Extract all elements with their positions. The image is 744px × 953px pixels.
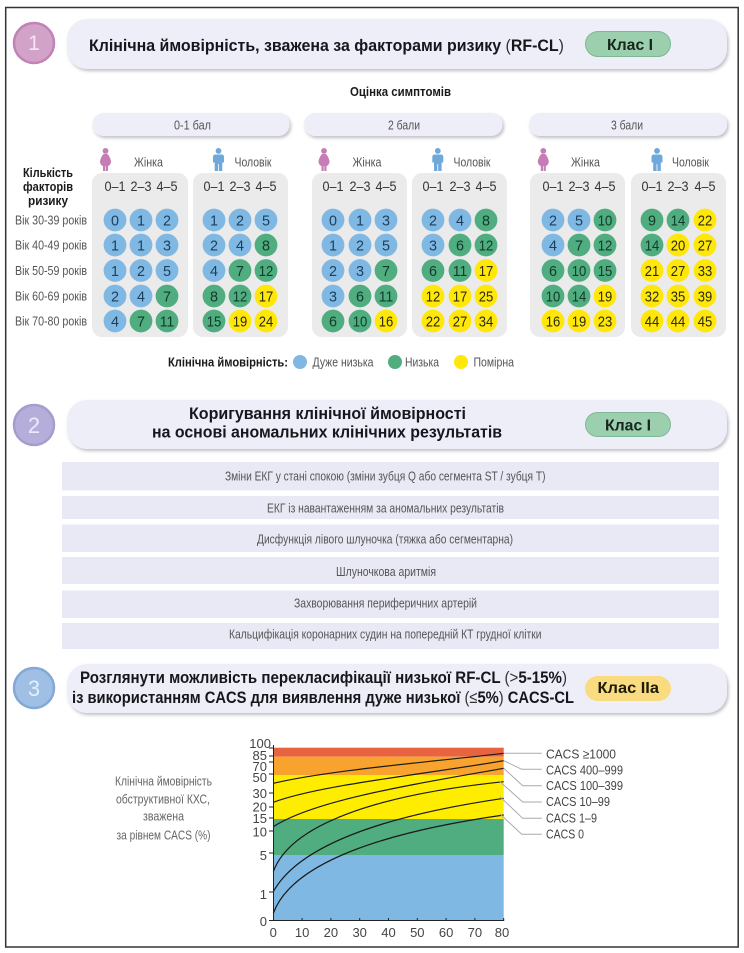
panel: 3 points, woman: 4 <box>549 238 557 254</box>
panel: 2 points, woman: 5 <box>382 238 390 254</box>
y-axis tick labels: 100 <box>249 736 271 751</box>
y-axis tick labels: 0 <box>260 914 267 929</box>
curve labels: CACS 10–99 <box>546 794 610 809</box>
panel: 2 points, man <box>412 173 507 337</box>
class badge: section 2 <box>586 412 670 436</box>
finding: LV dysfunction: Дисфункція лівого шлуночка (тяжка або сегментарна) <box>257 532 513 546</box>
x-axis tick labels: 50 <box>410 925 425 940</box>
section 3 heading bar: із використанням CACS для виявлення дуже низької (≤5%) CACS-CL <box>72 688 574 707</box>
panel: 3 points, woman: 12 <box>598 238 612 254</box>
panel: 2 points, man: 12 <box>426 288 440 306</box>
icon: man 1 <box>213 148 224 171</box>
panel: 2 points, man: 17 <box>453 288 467 306</box>
finding: LV dysfunction <box>62 524 719 552</box>
panel: 0-1 points, man: 17 <box>259 288 273 306</box>
panel: 2 points, man: 6 <box>429 263 437 280</box>
leader lines <box>500 753 542 834</box>
icon: man 3 <box>652 148 662 171</box>
curve labels: CACS 400–999 <box>546 762 623 778</box>
panel: 3 points, woman: 0–1 <box>542 179 564 194</box>
panel: 3 points, man: 32 <box>645 288 659 306</box>
panel: 0-1 points, man: 5 <box>262 212 270 230</box>
label: woman 2: Жінка <box>352 154 382 170</box>
finding: coronary calcification: Кальцифікація коронарних судин на попередній КТ грудної клітки <box>229 626 542 642</box>
curve labels: CACS 1–9 <box>546 810 597 826</box>
panel: 0-1 points, man <box>193 173 288 337</box>
age labels: Вік 60-69 років <box>15 288 87 304</box>
panel: 0-1 points, woman: 7 <box>163 288 171 306</box>
icon: woman 2 <box>318 148 330 171</box>
axes <box>269 745 504 921</box>
panel: 0-1 points, woman: 1 <box>137 238 145 254</box>
y-axis tick labels: 15 <box>253 811 267 826</box>
y-axis title <box>115 774 212 842</box>
panel: 3 points, man: 9 <box>648 212 656 230</box>
panel: 3 points, woman: 4–5 <box>594 179 616 194</box>
panel: 2 points, man: 25 <box>479 288 493 306</box>
class badge: section 2: Клас I <box>605 418 651 434</box>
panel: 2 points, man: 17 <box>479 263 493 280</box>
y-axis tick labels: 5 <box>260 848 267 863</box>
icon: woman 1 <box>100 148 111 171</box>
panel: 2 points, man: 22 <box>426 314 440 330</box>
panel: 3 points, man: 14 <box>645 238 659 254</box>
label: man 3: Чоловік <box>672 154 709 170</box>
section 1 heading bar <box>67 19 727 69</box>
y-axis tick labels <box>249 736 271 929</box>
panel: 3 points, man: 27 <box>671 263 685 280</box>
panel: 2 points, man: 2 <box>429 212 437 230</box>
panel: 3 points, man: 27 <box>698 238 712 254</box>
curve labels <box>546 746 623 842</box>
panel: 0-1 points, man: 2–3 <box>230 179 250 194</box>
y-axis title: зважена <box>143 808 185 824</box>
panel: 3 points, man: 2–3 <box>668 179 688 194</box>
panel: 2 points, woman: 3 <box>329 288 337 306</box>
panel: 3 points, man: 45 <box>698 314 712 330</box>
panel: 2 points, woman: 3 <box>382 212 390 230</box>
age labels: Вік 40-49 років <box>15 238 87 252</box>
panel: 3 points, woman: 2 <box>549 212 557 230</box>
x-axis tick labels: 20 <box>324 925 338 940</box>
age labels: Вік 70-80 років <box>15 314 87 328</box>
panel: 0-1 points, man: 4–5 <box>256 179 276 194</box>
panel: 0-1 points, woman: 0 <box>111 212 119 230</box>
section 1 number badge <box>14 23 54 63</box>
panel: 3 points, woman: 6 <box>549 263 557 280</box>
panel: 3 points, woman: 10 <box>572 263 586 280</box>
panel: 0-1 points, man: 12 <box>233 288 247 306</box>
panel: 3 points, man: 20 <box>671 238 685 254</box>
panel: 0-1 points, man: 0–1 <box>204 179 224 194</box>
panel: 0-1 points, woman: 4–5 <box>156 179 178 194</box>
panel: 0-1 points, woman: 2 <box>111 288 119 306</box>
curve labels: CACS 100–399 <box>546 778 623 793</box>
section 2 heading bar: Коригування клінічної ймовірності <box>189 404 466 423</box>
y-axis title: обструктивної КХС, <box>116 792 210 806</box>
panel: 3 points, woman: 19 <box>598 288 612 306</box>
panel: 2 points, woman: 0–1 <box>322 179 344 194</box>
panel: 0-1 points, man: 8 <box>262 238 270 254</box>
pill: 0-1 points: 0-1 бал <box>174 118 211 132</box>
pill: 2 points: 2 бали <box>388 118 420 132</box>
panel: 0-1 points, woman: 2–3 <box>130 179 152 194</box>
panel: 2 points, woman: 11 <box>379 288 393 306</box>
subheading: symptom score: Оцінка симптомів <box>350 85 451 99</box>
likelihood curves <box>273 753 504 913</box>
x-axis tick labels <box>270 925 509 940</box>
panel: 0-1 points, woman: 3 <box>163 238 171 254</box>
legend: clinical likelihood <box>168 354 515 370</box>
x-axis tick labels: 0 <box>270 925 277 940</box>
panel: 0-1 points, man: 4 <box>236 238 244 254</box>
legend: clinical likelihood: Низька <box>405 354 440 370</box>
panel: 2 points, woman: 1 <box>329 238 337 254</box>
chart bands <box>273 748 504 920</box>
panel: 3 points, man: 14 <box>671 212 685 230</box>
section 3 heading bar: Розглянути можливість перекласифікації низької RF-CL (>5-15%) <box>80 668 567 687</box>
list: abnormal clinical findings <box>62 462 719 649</box>
icon: woman 3 <box>538 148 549 171</box>
finding: exercise ECG <box>62 496 719 519</box>
pill: 2 points <box>304 113 502 136</box>
panel: 0-1 points, man: 7 <box>236 263 244 280</box>
panel: 3 points, woman: 19 <box>572 314 586 330</box>
x-axis tick labels: 30 <box>352 925 367 940</box>
y-axis tick labels: 85 <box>253 748 267 763</box>
finding: exercise ECG: ЕКГ із навантаженням за аномальних результатів <box>267 500 504 516</box>
y-axis tick labels: 20 <box>253 800 267 814</box>
panel: 2 points, man: 27 <box>453 314 467 330</box>
section 2 number badge: 2 <box>28 413 40 438</box>
panel: 3 points, woman: 14 <box>572 288 586 306</box>
section 2 heading bar: на основі аномальних клінічних результатів <box>152 422 502 442</box>
curve labels: CACS ≥1000 <box>546 746 616 762</box>
panel: 2 points, man: 8 <box>482 212 490 230</box>
panel: 3 points, man: 39 <box>698 288 712 306</box>
panel: 2 points, woman <box>312 173 407 337</box>
panel: 3 points, man: 0–1 <box>642 179 662 194</box>
panel: 2 points, man: 11 <box>453 263 467 280</box>
x-axis tick labels: 70 <box>468 925 482 940</box>
panel: 2 points, man: 6 <box>456 238 464 254</box>
class badge: section 3: Клас IIa <box>598 680 659 697</box>
section 1 heading bar: Клінічна ймовірність, зважена за факторами ризику (RF-CL) <box>89 36 564 55</box>
panel: 2 points, woman: 16 <box>379 314 393 330</box>
y-axis tick labels: 1 <box>260 887 267 902</box>
panel: 2 points, woman: 3 <box>356 263 364 280</box>
panel: 0-1 points, woman: 1 <box>111 263 119 280</box>
panel: 2 points, woman: 7 <box>382 263 390 280</box>
panel: 0-1 points, woman: 11 <box>160 314 174 330</box>
panel: 3 points, woman: 7 <box>575 238 583 254</box>
x-axis tick labels: 40 <box>381 925 396 940</box>
label: man 2: Чоловік <box>454 154 491 170</box>
panel: 3 points, woman: 10 <box>598 212 612 230</box>
panel: 0-1 points, woman <box>92 173 188 337</box>
row header: number of risk factors: Кількість <box>23 165 73 180</box>
y-axis tick labels: 70 <box>253 759 267 774</box>
age labels: Вік 50-59 років <box>15 263 87 278</box>
panel: 2 points, woman: 6 <box>356 288 364 306</box>
section 1 number badge: 1 <box>28 32 40 55</box>
panel: 3 points, man: 44 <box>645 314 659 330</box>
finding: resting ECG: Зміни ЕКГ у стані спокою (зміни зубця Q або сегмента ST / зубця T) <box>225 468 546 484</box>
finding: peripheral artery disease: Захворювання периферичних артерій <box>294 596 477 610</box>
section 2 heading bar <box>67 400 727 449</box>
panel: 0-1 points, woman: 0–1 <box>104 179 126 194</box>
finding: resting ECG <box>62 462 719 490</box>
panel: 0-1 points, woman: 5 <box>163 263 171 280</box>
x-axis tick labels: 10 <box>295 925 309 940</box>
section 3 number badge <box>14 668 54 708</box>
finding: ventricular arrhythmia <box>62 557 719 584</box>
panel: 3 points, woman: 2–3 <box>568 179 590 194</box>
class badge: section 3 <box>585 676 671 701</box>
panel: 3 points, man <box>631 173 726 337</box>
pill: 0-1 points <box>92 113 290 136</box>
panel: 2 points, man: 34 <box>479 314 493 330</box>
legend: clinical likelihood: Клінічна ймовірність: <box>168 354 288 370</box>
panel: 3 points, man: 44 <box>671 314 685 330</box>
panel: 2 points, woman: 2 <box>329 263 337 280</box>
legend: clinical likelihood: Дуже низька <box>312 354 374 370</box>
panel: 3 points, woman <box>530 173 625 337</box>
panel: 2 points, woman: 1 <box>356 212 364 230</box>
panel: 3 points, woman: 5 <box>575 212 583 230</box>
class badge: section 1 <box>586 32 670 56</box>
panel: 2 points, man: 0–1 <box>422 179 444 194</box>
panel: 3 points, man: 4–5 <box>694 179 716 194</box>
finding: ventricular arrhythmia: Шлуночкова аритмія <box>336 564 436 579</box>
panel: 0-1 points, man: 2 <box>236 212 244 230</box>
age labels <box>15 212 87 328</box>
panel: 2 points, man: 2–3 <box>450 179 470 194</box>
panel: 0-1 points, man: 19 <box>233 314 247 330</box>
panel: 2 points, man: 12 <box>479 238 493 254</box>
panel: 3 points, woman: 23 <box>598 314 612 330</box>
legend: clinical likelihood: Помірна <box>474 354 515 370</box>
panel: 0-1 points, woman: 4 <box>111 314 119 330</box>
panel: 2 points, woman: 2–3 <box>350 179 370 194</box>
label: man 1: Чоловік <box>234 154 272 170</box>
panel: 3 points, man: 35 <box>671 288 685 306</box>
x-axis tick labels: 80 <box>495 925 509 940</box>
section 3 number badge: 3 <box>28 676 40 701</box>
panel: 0-1 points, woman: 4 <box>137 288 145 306</box>
panel: 0-1 points, man: 4 <box>210 263 218 280</box>
panel: 0-1 points, woman: 2 <box>163 212 171 230</box>
panel: 3 points, man: 21 <box>645 263 659 280</box>
panel: 0-1 points, woman: 2 <box>137 263 145 280</box>
row header: number of risk factors <box>23 165 73 208</box>
panel: 2 points, woman: 6 <box>329 314 337 330</box>
icon: man 2 <box>432 148 443 171</box>
pill: 3 points <box>529 113 727 136</box>
panel: 2 points, man: 3 <box>429 238 437 254</box>
panel: 2 points, woman: 2 <box>356 238 364 254</box>
panel: 2 points, woman: 0 <box>329 212 337 230</box>
class badge: section 1: Клас I <box>607 37 653 54</box>
age labels: Вік 30-39 років <box>15 212 87 228</box>
y-axis tick labels: 10 <box>253 824 267 840</box>
finding: peripheral artery disease <box>62 590 719 618</box>
section 2 number badge <box>14 405 54 445</box>
panel: 0-1 points, woman: 1 <box>111 238 119 254</box>
panel: 0-1 points, man: 1 <box>210 212 218 230</box>
chart: CACS-weighted clinical likelihood <box>249 736 623 940</box>
y-axis tick labels: 30 <box>253 786 267 801</box>
panel: 3 points, woman: 10 <box>546 288 560 306</box>
panel: 2 points, woman: 10 <box>353 314 367 330</box>
panel: 0-1 points, man: 24 <box>259 314 273 330</box>
label: woman 1: Жінка <box>134 154 164 170</box>
panel: 2 points, man: 4–5 <box>476 179 496 194</box>
panel: 3 points, woman: 16 <box>546 314 560 330</box>
row header: number of risk factors: ризику <box>28 193 69 208</box>
section 3 heading bar <box>67 664 727 713</box>
y-axis title: за рівнем CACS (%) <box>116 828 210 842</box>
y-axis tick labels: 50 <box>253 770 267 785</box>
y-axis title: Клінічна ймовірність <box>115 774 212 788</box>
panel: 0-1 points, man: 12 <box>259 263 273 280</box>
x-axis tick labels: 60 <box>439 925 453 940</box>
panel: 3 points, man: 33 <box>698 263 712 280</box>
pill: 3 points: 3 бали <box>611 118 643 132</box>
panel: 0-1 points, man: 2 <box>210 238 218 254</box>
panel: 3 points, man: 22 <box>698 212 712 230</box>
label: woman 3: Жінка <box>571 154 601 170</box>
curve labels: CACS 0 <box>546 826 584 842</box>
panel: 3 points, woman: 15 <box>598 263 612 280</box>
panel: 0-1 points, man: 15 <box>207 314 221 330</box>
panel: 0-1 points, woman: 7 <box>137 314 145 330</box>
panel: 2 points, man: 4 <box>456 212 464 230</box>
finding: coronary calcification <box>62 623 719 649</box>
panel: 0-1 points, woman: 1 <box>137 212 145 230</box>
panel: 0-1 points, man: 8 <box>210 288 218 306</box>
panel: 2 points, woman: 4–5 <box>376 179 396 194</box>
row header: number of risk factors: факторів <box>23 179 73 194</box>
